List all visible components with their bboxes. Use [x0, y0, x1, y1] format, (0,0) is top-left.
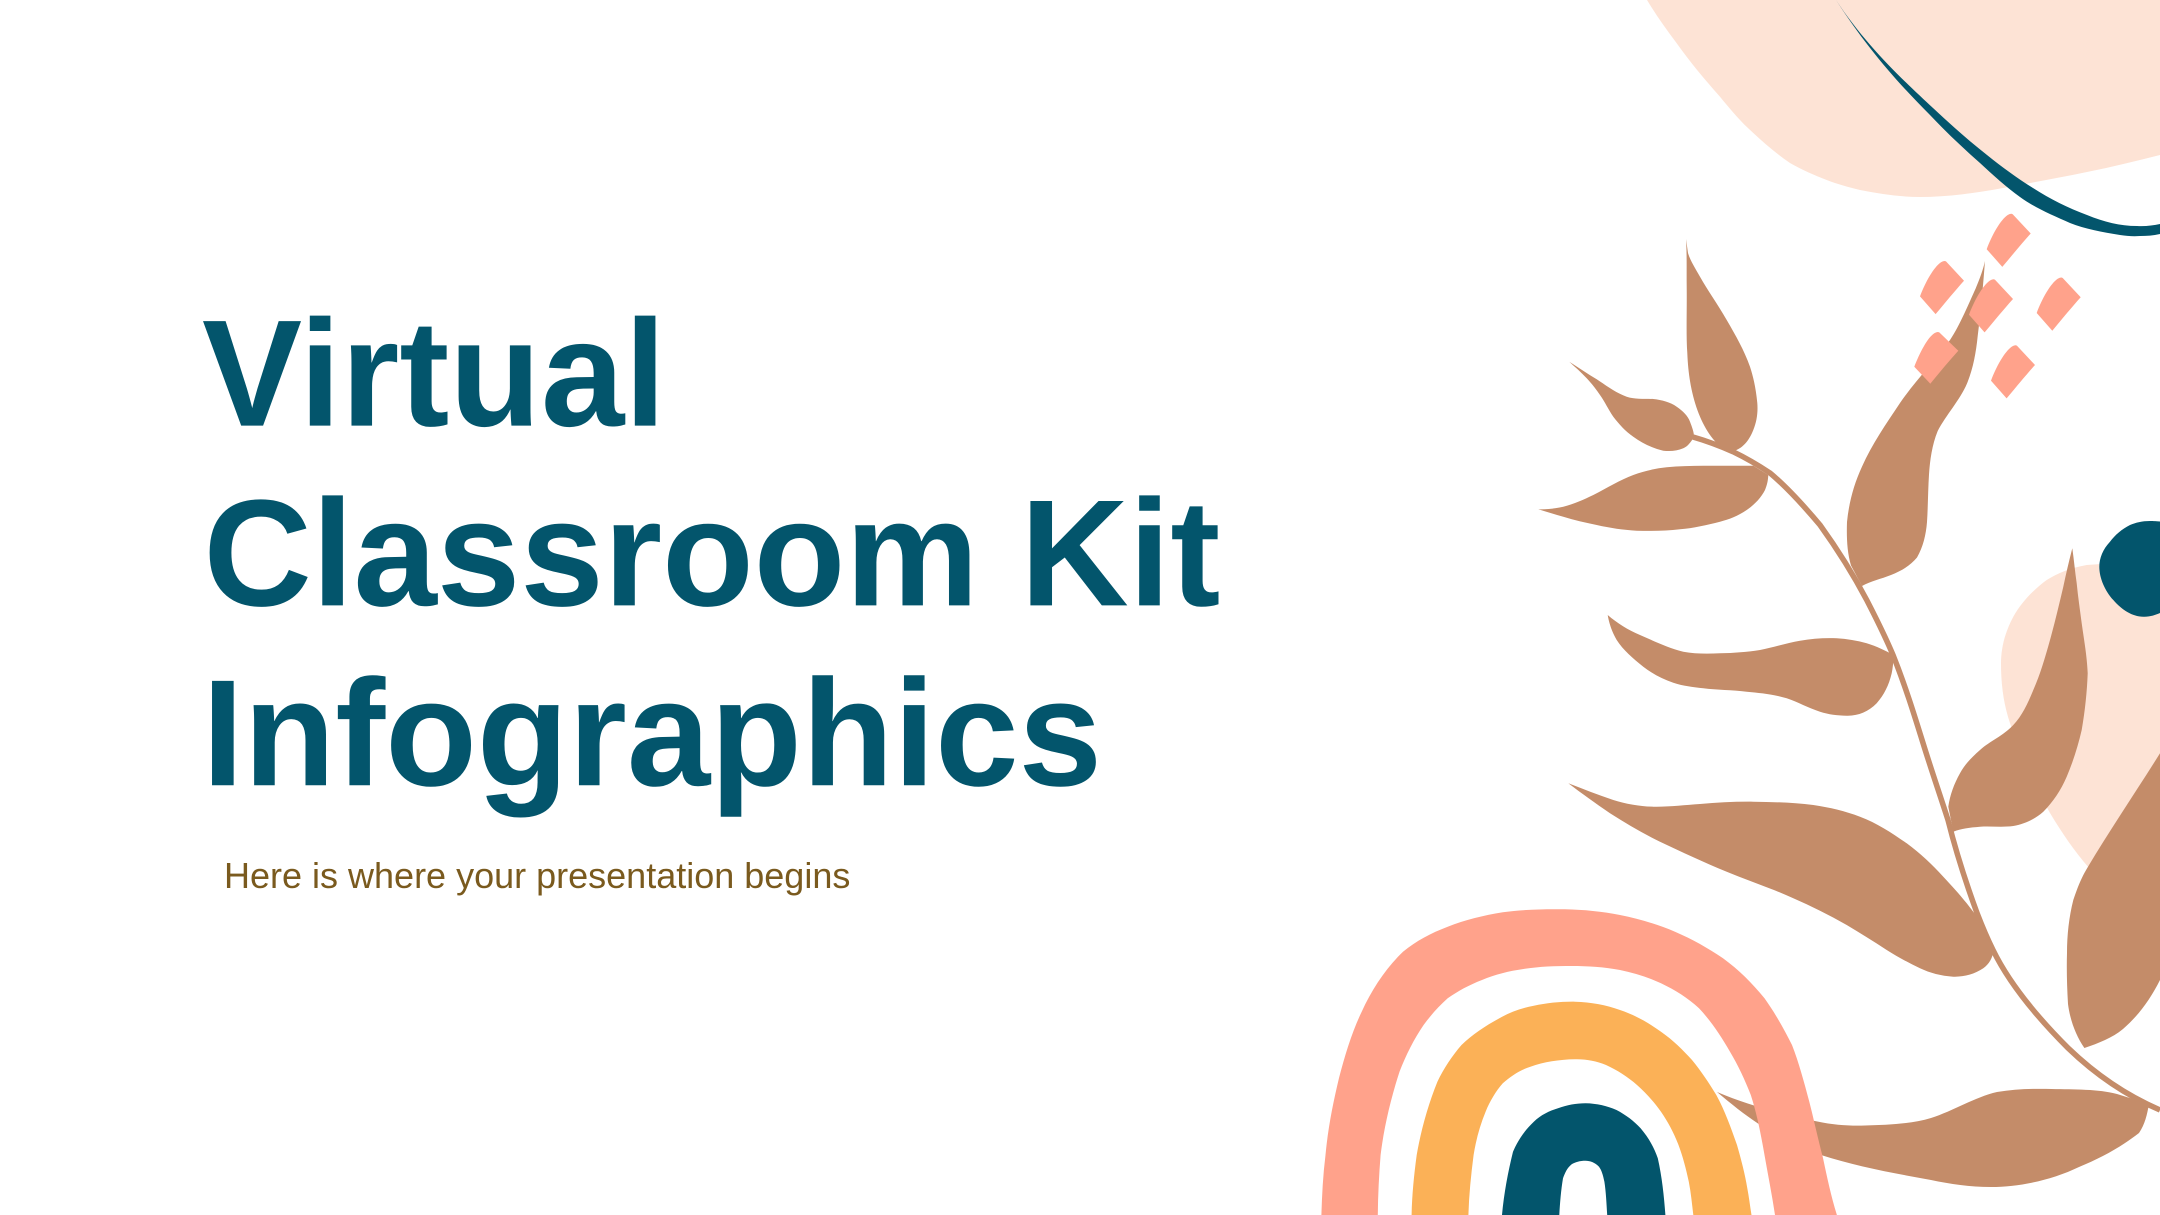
teal curved line	[1836, 0, 2160, 236]
title	[202, 288, 1220, 817]
diamonds: salmon petals	[1914, 214, 2081, 398]
subtitle: Here is where your presentation begins	[224, 855, 850, 896]
leaf 8: far right	[2067, 753, 2160, 1048]
leaf 4: long upward	[1847, 261, 1985, 586]
leaf 7: large lower	[1568, 783, 1993, 977]
rainbow: salmon arc	[1321, 909, 1837, 1215]
title line 1: Virtual	[202, 288, 666, 458]
leaf 5: right upward	[1948, 548, 2088, 832]
rainbow: teal arc	[1502, 1103, 1665, 1215]
peach blob: right	[2001, 560, 2160, 900]
rainbow	[1321, 909, 1837, 1215]
leaf 6: middle left	[1608, 615, 1893, 716]
leaf 1: upright	[1686, 239, 1758, 451]
leaf 9: bottom	[1717, 1089, 2149, 1187]
rainbow: orange arc	[1412, 1002, 1752, 1215]
title line 2: Classroom Kit	[204, 468, 1220, 638]
leaf 3: left	[1538, 466, 1768, 531]
branch stem	[1693, 437, 2160, 1110]
title line 3: Infographics	[202, 647, 1102, 817]
peach blob: top right	[1647, 0, 2160, 197]
leaf 2: upper left	[1569, 362, 1694, 451]
branch with leaves	[1538, 239, 2160, 1187]
teal blob: right edge	[2099, 521, 2160, 617]
